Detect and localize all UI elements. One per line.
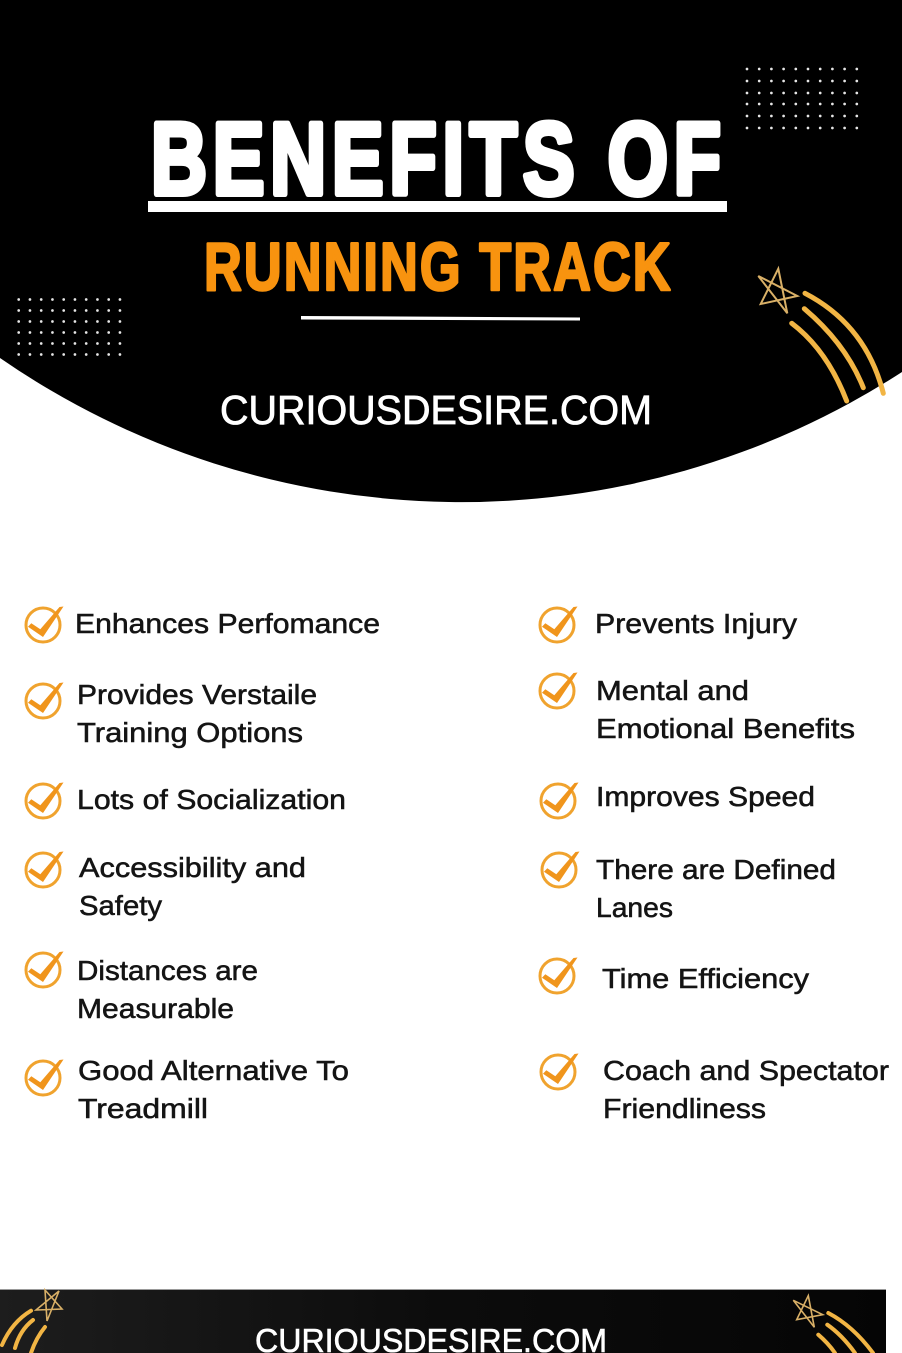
item: good alternative to treadmill: Treadmill	[78, 1093, 208, 1124]
item: lots of socialization	[26, 782, 346, 818]
footer shooting star: right	[793, 1296, 873, 1353]
item: mental and emotional benefits	[540, 672, 855, 744]
title: benefits of: BENEFITS OF	[151, 103, 721, 217]
item: mental and emotional benefits: Mental and	[596, 675, 749, 706]
benefits list: right column	[540, 606, 889, 1124]
shooting star icon	[758, 269, 883, 401]
item: there are defined lanes	[542, 852, 836, 923]
item: good alternative to treadmill	[26, 1055, 349, 1124]
item: provides verstaile training options: Training Options	[77, 717, 303, 748]
item: distances are measurable	[26, 952, 258, 1024]
item: time efficiency	[540, 958, 809, 994]
item: enhances perfomance: Enhances Perfomance	[75, 608, 380, 639]
footer shooting star: left	[2, 1290, 62, 1353]
item: distances are measurable: Measurable	[77, 993, 234, 1024]
footer band	[0, 1289, 886, 1353]
item: enhances perfomance	[26, 606, 380, 642]
dot grid: top right	[747, 69, 858, 128]
website label: CURIOUSDESIRE.COM	[220, 387, 652, 433]
item: coach and spectator friendliness	[541, 1054, 889, 1124]
subtitle: running track: RUNNING TRACK	[204, 228, 671, 305]
item: improves speed: Improves Speed	[596, 781, 815, 812]
item: provides verstaile training options: Provides Verstaile	[77, 679, 317, 710]
item: accessibility and safety: Accessibility and	[79, 852, 306, 883]
item: prevents injury: Prevents Injury	[595, 608, 797, 639]
item: accessibility and safety	[26, 852, 306, 921]
benefits list: left column	[26, 606, 380, 1124]
item: mental and emotional benefits: Emotional Benefits	[596, 713, 855, 744]
item: coach and spectator friendliness: Friendliness	[603, 1093, 766, 1124]
item: accessibility and safety: Safety	[79, 890, 162, 921]
item: there are defined lanes: There are Defined	[596, 854, 836, 885]
title underline	[148, 201, 727, 212]
item: provides verstaile training options	[26, 679, 317, 748]
subtitle underline	[301, 316, 580, 320]
item: improves speed	[541, 781, 815, 818]
item: there are defined lanes: Lanes	[596, 892, 673, 923]
item: lots of socialization: Lots of Socialization	[77, 784, 346, 815]
item: distances are measurable: Distances are	[77, 955, 258, 986]
panel: black header with curved base	[0, 0, 902, 502]
dot grid: left	[19, 300, 121, 354]
item: prevents injury	[540, 606, 797, 642]
item: time efficiency: Time Efficiency	[602, 963, 809, 994]
item: good alternative to treadmill: Good Alternative To	[78, 1055, 349, 1086]
item: coach and spectator friendliness: Coach and Spectator	[603, 1055, 889, 1086]
